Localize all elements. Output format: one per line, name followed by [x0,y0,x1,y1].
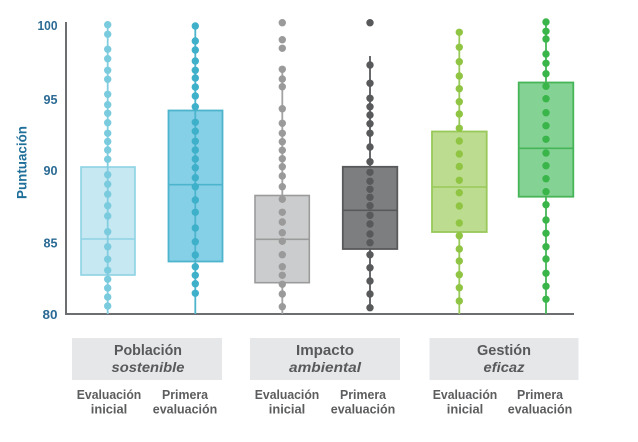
box plot: Población sostenible, evaluación inicial [81,21,135,314]
label: primera evaluación, Gestión: Primera [517,387,564,402]
label: primera evaluación, Población: Primera [162,387,209,402]
y-axis labels: 85 [44,236,58,250]
label: primera evaluación, Gestión: evaluación [508,402,572,416]
axes [66,22,574,314]
y-axis labels: 80 [42,307,58,322]
category panel: Gestión eficaz: eficaz [484,359,524,375]
label: evaluación inicial, Población [77,387,141,416]
label: primera evaluación, Impacto [331,387,395,416]
label: evaluación inicial, Impacto: Evaluación [255,387,319,402]
category panel: Impacto ambiental: ambiental [289,359,362,375]
label: primera evaluación, Población: evaluación [153,402,217,416]
label: evaluación inicial, Gestión: Evaluación [433,387,497,402]
y-axis labels: 95 [44,92,58,107]
label: evaluación inicial, Gestión: inicial [447,402,483,416]
label: primera evaluación, Población [153,387,217,416]
box plot: Gestión eficaz, evaluación inicial [432,29,487,314]
category panel: Población sostenible [72,338,222,380]
label: evaluación inicial, Impacto: inicial [269,402,305,416]
category panel: Gestión eficaz [430,338,578,380]
y-axis title: Puntuación [14,126,30,199]
category panel: Impacto ambiental: Impacto [296,343,354,359]
box plot: Población sostenible, primera evaluación [168,22,222,314]
box plot: Impacto ambiental, evaluación inicial [255,19,309,314]
label: evaluación inicial, Población: inicial [91,402,127,416]
y-axis labels: 100 [38,18,58,33]
box plot: Gestión eficaz, primera evaluación [519,18,573,314]
label: evaluación inicial, Población: Evaluación [77,387,141,402]
label: primera evaluación, Impacto: Primera [340,387,387,402]
category panel: Impacto ambiental [250,338,400,380]
label: primera evaluación, Gestión [508,387,572,416]
category panel: Gestión eficaz: Gestión [477,343,531,359]
box plot: Impacto ambiental, primera evaluación [343,19,397,311]
label: primera evaluación, Impacto: evaluación [331,402,395,416]
label: evaluación inicial, Gestión [433,387,497,416]
y-axis labels: 90 [44,163,58,178]
y-axis labels [38,18,58,322]
category panel: Población sostenible: Población [114,343,182,359]
category panel: Población sostenible: sostenible [112,359,185,375]
label: evaluación inicial, Impacto [255,387,319,416]
